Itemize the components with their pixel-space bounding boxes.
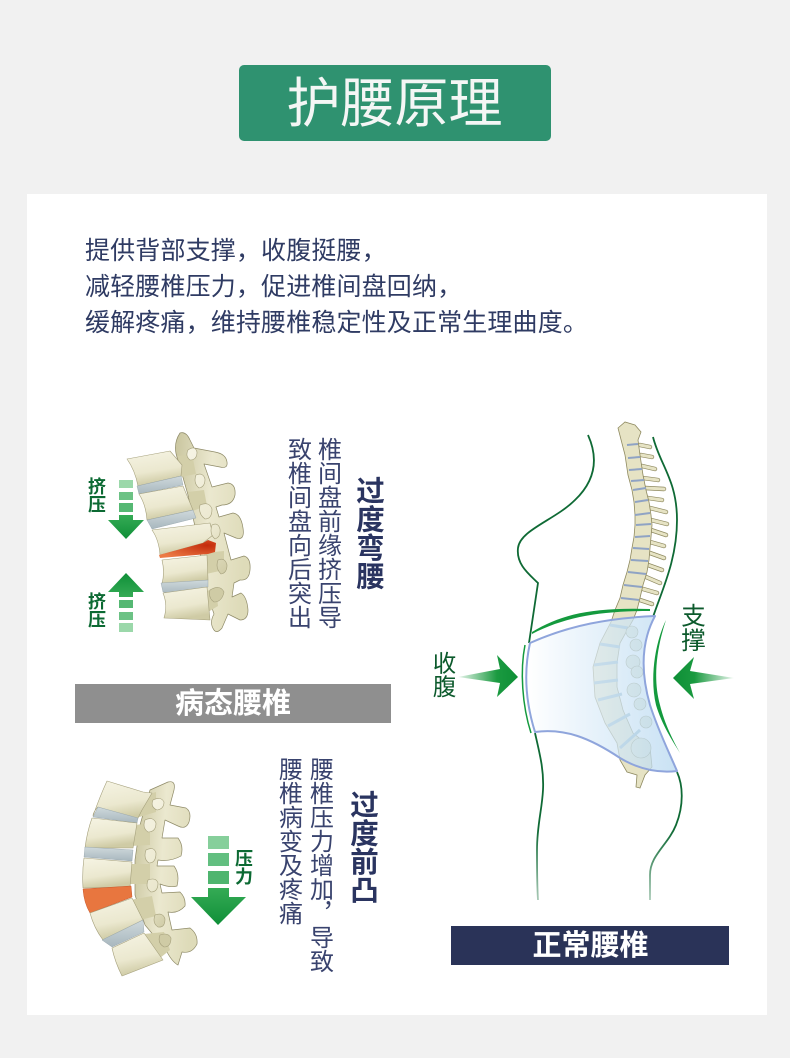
label: support: 支撑 [678,603,705,652]
belt left green arc [522,645,531,733]
main white panel [27,194,767,1015]
description: excessive bending: 椎间盘前缘挤压导 [314,437,342,629]
label: abdomen in: 收腹 [430,651,456,698]
panel: normal lumbar figure [430,422,734,900]
belt top green band [532,609,650,634]
description: excessive lordosis: 腰椎病变及疼痛 [274,757,302,925]
intro text: 减轻腰椎压力，促进椎间盘回纳， [85,273,462,301]
arrow: back support [673,657,734,699]
arrow: up squeeze [108,573,144,632]
body outline front [518,435,594,643]
arrow: abdomen in [458,655,518,697]
title banner: 护腰原理 [286,74,502,134]
lower body outline [535,733,682,900]
arrow: down squeeze [108,480,144,539]
intro text: 缓解疼痛，维持腰椎稳定性及正常生理曲度。 [85,309,588,337]
intro text: 提供背部支撑，收腹挺腰， [85,237,387,265]
banner: normal lumbar [451,926,729,965]
spine [593,422,667,788]
banner: pathological lumbar [75,684,391,723]
heading: excessive lordosis: 过度前凸 [346,790,378,904]
heading: excessive bending: 过度弯腰 [352,476,384,590]
herniated disc, red [159,540,216,558]
intro text [85,237,588,337]
body outline back [653,437,677,617]
label: pressure: 压力 [233,849,253,886]
title banner [239,65,551,141]
illustration: bent vertebrae [127,433,250,632]
lumbar support belt [526,616,677,772]
description: excessive bending: 致椎间盘向后突出 [284,437,312,629]
panel: excessive lordosis spine [83,757,378,976]
belt right green arc [653,620,680,753]
illustration: lordotic vertebrae [83,781,197,976]
banner: pathological lumbar: 病态腰椎 [175,687,291,720]
description: excessive lordosis [274,757,334,973]
compressed disc, red [83,886,132,913]
banner: normal lumbar: 正常腰椎 [532,929,649,962]
panel: excessive bending spine [86,433,384,632]
arrow: pressure [191,836,246,925]
lumbar processes [626,626,652,758]
label: squeeze top: 挤压 [86,477,106,513]
description: excessive bending [284,437,342,629]
label: squeeze bottom: 挤压 [86,592,106,628]
description: excessive lordosis: 腰椎压力增加，导致 [306,757,334,973]
discs [594,444,651,748]
spinous processes [640,445,667,604]
